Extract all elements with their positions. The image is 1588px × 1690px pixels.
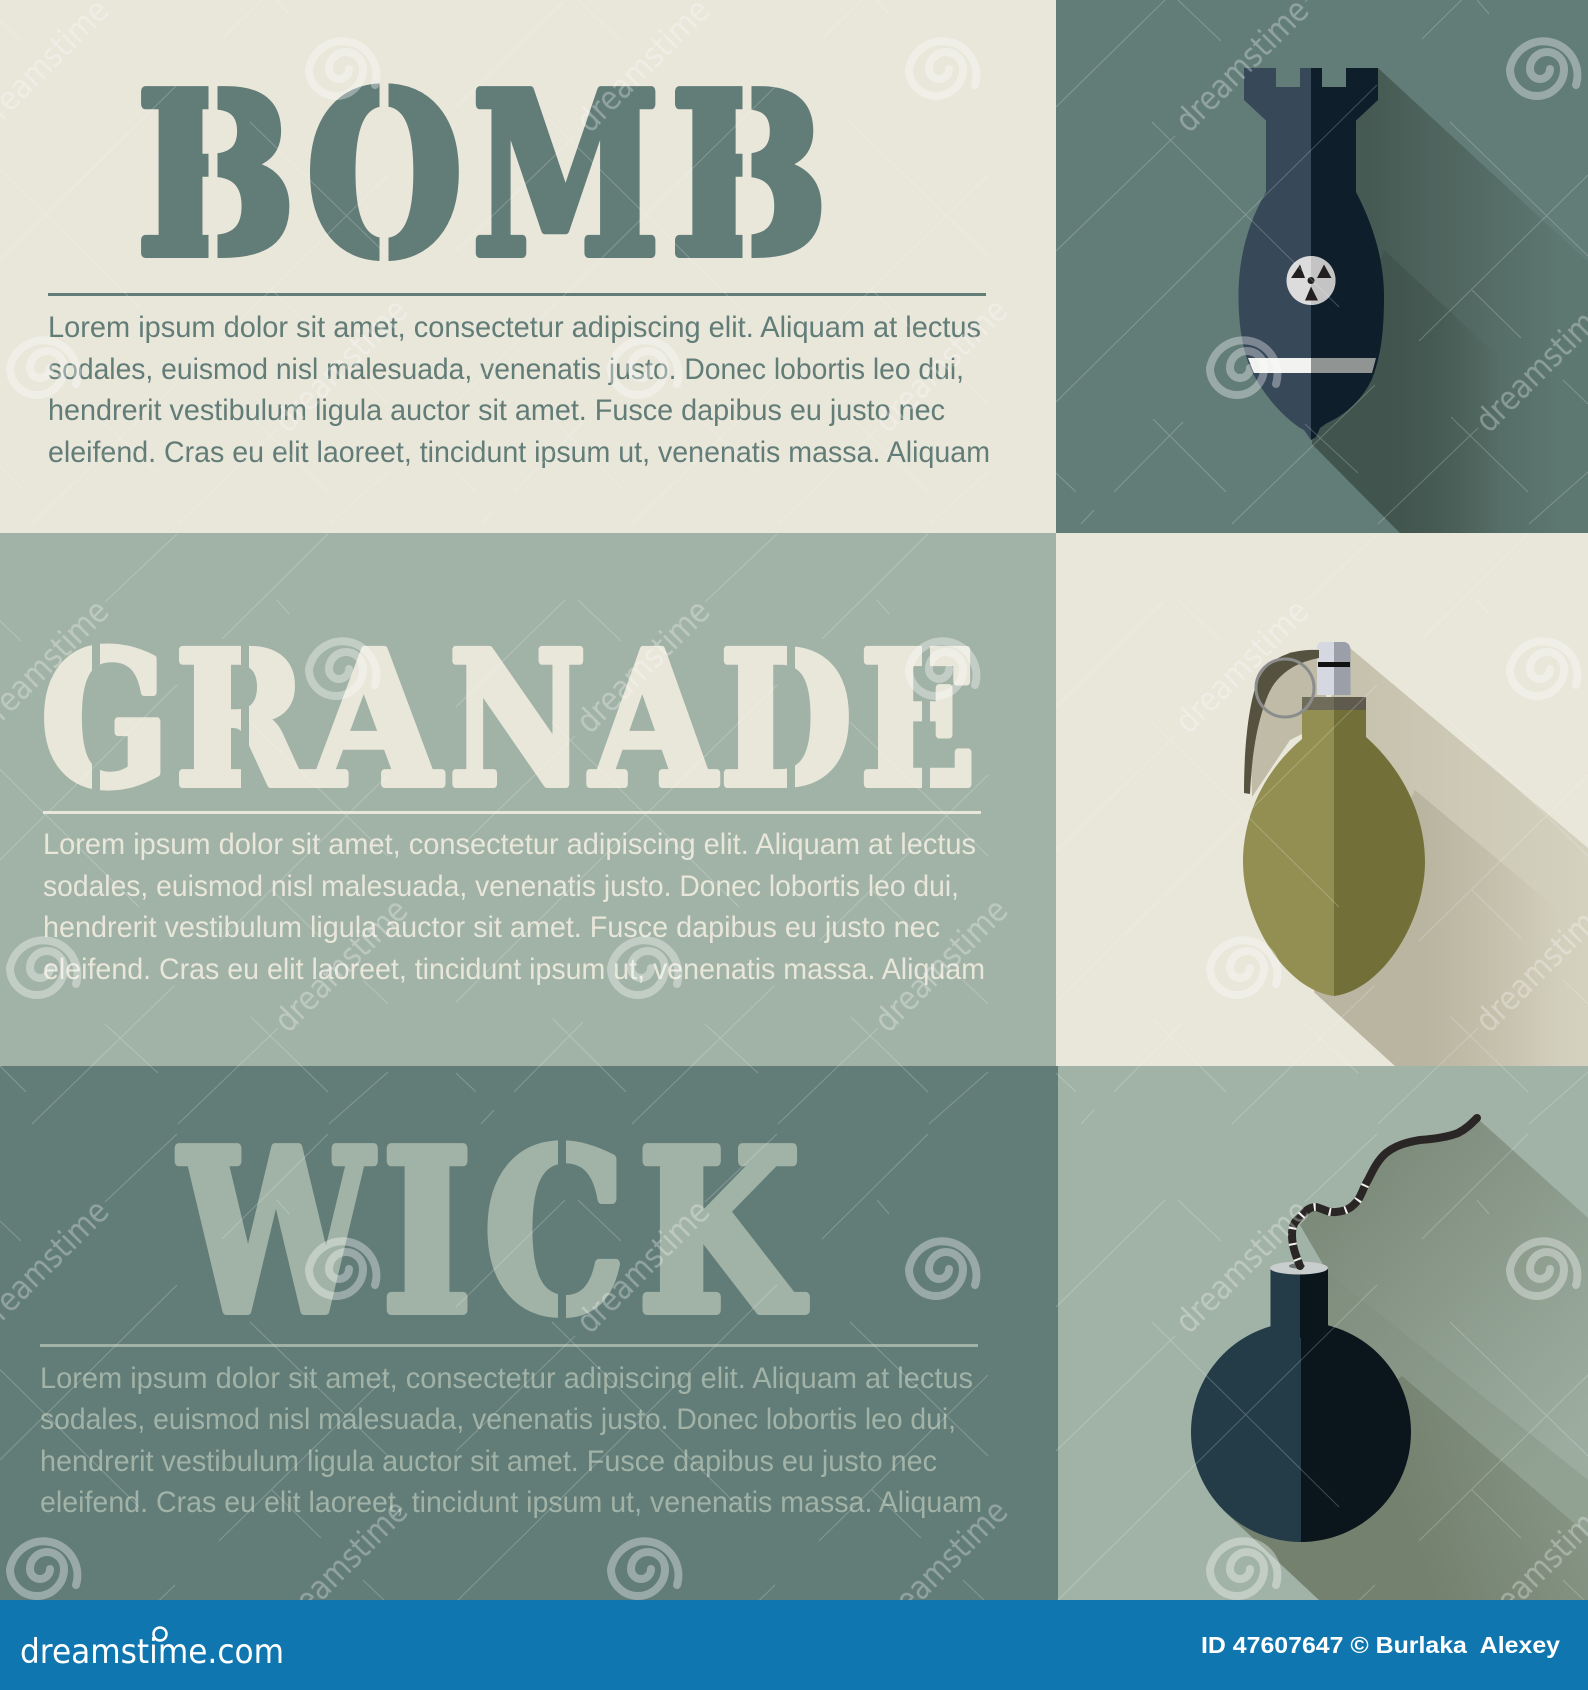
text block: bomb description xyxy=(48,311,990,469)
watermark pattern: dreamstime xyxy=(266,290,415,440)
panel: wick text xyxy=(0,1066,1058,1600)
title: BOMB: O xyxy=(306,46,462,306)
text block: bomb description: Lorem ipsum dolor sit amet, consectetur adipiscing elit. Aliquam at lectus xyxy=(48,311,981,344)
footer credit: ID 47607647 © Burlaka Alexey xyxy=(1201,1632,1560,1658)
watermark pattern: dreamstime xyxy=(866,1491,1015,1641)
watermark pattern: dreamstime xyxy=(866,890,1015,1040)
title: WICK xyxy=(178,1103,806,1363)
long shadow: bomb xyxy=(1312,68,1588,533)
watermark pattern: dreamstime xyxy=(568,591,717,741)
title: GRANADE: A xyxy=(589,612,717,828)
watermark pattern: dreamstime xyxy=(568,1191,717,1341)
title: BOMB: M xyxy=(472,46,660,306)
title: GRANADE: N xyxy=(449,612,586,828)
text block: wick description xyxy=(40,1362,982,1519)
title: GRANADE: E xyxy=(860,612,976,828)
text block: granade description: Lorem ipsum dolor sit amet, consectetur adipiscing elit. Aliquam at lectus xyxy=(43,828,976,861)
text block: bomb description: hendrerit vestibulum ligula auctor sit amet. Fusce dapibus eu justo nec xyxy=(48,394,945,427)
footer bar xyxy=(0,1600,1588,1690)
long shadow: round bomb xyxy=(1223,1118,1588,1600)
title: BOMB: B xyxy=(670,46,828,306)
title: WICK: I xyxy=(382,1103,472,1363)
title: GRANADE: R xyxy=(175,612,309,828)
watermark pattern: dreamstime xyxy=(1167,1191,1316,1341)
watermark pattern: dreamstime xyxy=(266,890,415,1040)
icon: aerial bomb xyxy=(1238,68,1384,440)
text block: bomb description: eleifend. Cras eu elit laoreet, tincidunt ipsum ut, venenatis massa. Aliquam xyxy=(48,436,990,469)
title: BOMB: B xyxy=(136,46,296,306)
text block: wick description: eleifend. Cras eu elit laoreet, tincidunt ipsum ut, venenatis massa. Aliquam xyxy=(40,1486,982,1519)
title: GRANADE: D xyxy=(720,612,852,828)
title: GRANADE xyxy=(41,612,976,828)
title: BOMB xyxy=(136,46,828,306)
text block: granade description xyxy=(43,828,985,986)
watermark pattern: dreamstime xyxy=(866,290,1015,440)
icon: safety lever xyxy=(1244,650,1319,794)
footer logo: dreamstime.com: dreamstime.com xyxy=(20,1632,284,1672)
text block: wick description: Lorem ipsum dolor sit amet, consectetur adipiscing elit. Aliquam at lectus xyxy=(40,1362,973,1395)
watermark pattern: dreamstime xyxy=(266,1491,415,1641)
icon: hand grenade xyxy=(1243,642,1425,996)
icon: round bomb xyxy=(1191,1118,1477,1542)
icon: fuse xyxy=(1292,1118,1477,1266)
title: GRANADE: A xyxy=(308,612,442,828)
icon: pull ring xyxy=(1256,659,1314,717)
text block: granade description: sodales, euismod nisl malesuada, venenatis justo. Donec lobortis leo dui, xyxy=(43,870,959,903)
long shadow: grenade xyxy=(1250,648,1588,1066)
title: WICK: C xyxy=(484,1103,625,1363)
divider: granade xyxy=(43,811,981,814)
panel: wick bomb icon xyxy=(1058,1066,1588,1600)
panel: grenade icon xyxy=(1056,533,1588,1066)
text block: granade description: eleifend. Cras eu elit laoreet, tincidunt ipsum ut, venenatis massa. Aliquam xyxy=(43,953,985,986)
divider: bomb xyxy=(48,293,986,296)
text block: wick description: hendrerit vestibulum ligula auctor sit amet. Fusce dapibus eu justo nec xyxy=(40,1445,937,1478)
title: WICK: W xyxy=(178,1103,374,1363)
title: WICK: K xyxy=(638,1103,806,1363)
title: GRANADE: G xyxy=(41,612,169,828)
panel: granade text xyxy=(0,533,1056,1066)
text block: granade description: hendrerit vestibulum ligula auctor sit amet. Fusce dapibus eu justo nec xyxy=(43,911,940,944)
icon: radiation symbol xyxy=(1286,256,1336,305)
divider: wick xyxy=(40,1344,978,1347)
watermark pattern: dreamstime xyxy=(1167,591,1316,741)
text block: bomb description: sodales, euismod nisl malesuada, venenatis justo. Donec lobortis leo dui, xyxy=(48,353,964,386)
text block: wick description: sodales, euismod nisl malesuada, venenatis justo. Donec lobortis leo dui, xyxy=(40,1403,956,1436)
panel: bomb text xyxy=(0,0,1056,533)
panel: bomb icon xyxy=(1056,0,1588,533)
